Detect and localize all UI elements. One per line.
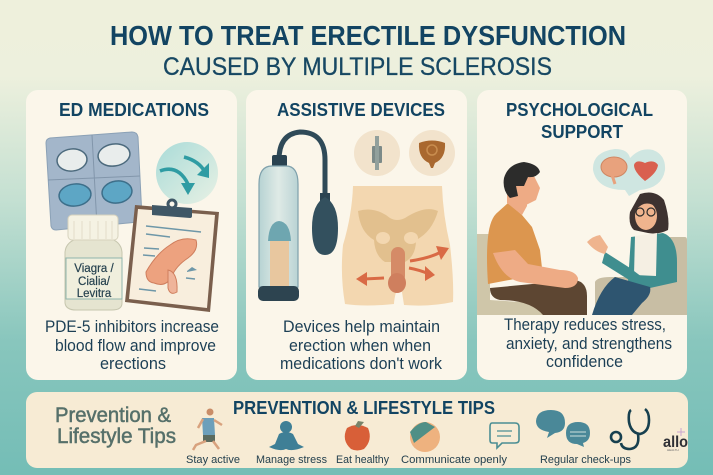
title [110,20,626,81]
icon: outlined speech bubble [490,423,519,448]
heading: ED medications: ED MEDICATIONS [59,100,209,120]
left caption [55,404,176,448]
icon: blister pack [46,132,142,230]
text: ED medications description [45,318,219,373]
text: assistive devices description: medications don't work [280,355,443,373]
icon: pill bottle: Cialia/ [78,276,111,288]
panel: assistive devices [246,90,467,380]
icon: pill bottle: Viagra / [74,263,115,275]
heading: psychological support: PSYCHOLOGICAL [506,100,653,120]
labels: tips: Regular check-ups [540,454,631,466]
icon: healthy plate [410,422,440,452]
text: assistive devices description: Devices help maintain [283,318,440,336]
icon: valve circle [354,130,400,176]
icon: pill bottle: Levitra [77,288,112,300]
icon: speech bubble with brain and heart [593,149,665,196]
text: ED medications description: PDE-5 inhibitors increase [45,318,219,336]
heading: prevention and lifestyle tips: PREVENTION & LIFESTYLE TIPS [233,398,495,418]
title: CAUSED BY MULTIPLE SCLEROSIS [163,53,552,81]
left caption: Lifestyle Tips [57,425,176,448]
illustration: man on couch [477,162,587,315]
left caption: Prevention & [55,404,171,427]
text: psychological support description [504,316,672,371]
text: ED medications description: blood flow and improve [55,337,216,355]
icon: blood flow arrows [156,142,218,204]
heading: psychological support: SUPPORT [541,122,623,142]
text: psychological support description: confidence [546,353,623,371]
title: HOW TO TREAT ERECTILE DYSFUNCTION [110,20,626,51]
icon: meditation [269,421,304,450]
icon: apple [345,421,370,450]
labels: tips [186,454,631,466]
text: assistive devices description [280,318,443,373]
labels: tips: Eat healthy [336,454,389,466]
logo: allo health: HEALTH [667,448,679,452]
heading: assistive devices: ASSISTIVE DEVICES [277,100,445,120]
panel: psychological support [477,90,687,380]
text: psychological support description: Therapy reduces stress, [504,316,666,334]
icon: vacuum pump [258,132,338,301]
icon: speech bubbles [536,410,590,447]
illustration: lower body with arrows [342,186,453,306]
logo: allo health [663,428,688,452]
panel: prevention and lifestyle tips [26,392,688,468]
logo: allo health: allo [663,434,688,451]
panel: ED medications [26,90,237,380]
icon: pill bottle [65,215,122,310]
icon: runner [193,408,222,450]
text: ED medications description: erections [100,355,166,373]
heading: psychological support [506,100,653,142]
labels: tips: Communicate openly [401,454,507,466]
icon: pelvic circle [409,130,455,176]
icon: clipboard [125,200,219,312]
icon: stethoscope [611,409,649,449]
text: assistive devices description: erection when when [289,337,431,355]
labels: tips: Manage stress [256,454,327,466]
labels: tips: Stay active [186,454,240,466]
illustration: therapist on chair [587,192,687,315]
text: psychological support description: anxiety, and strengthens [506,335,672,353]
